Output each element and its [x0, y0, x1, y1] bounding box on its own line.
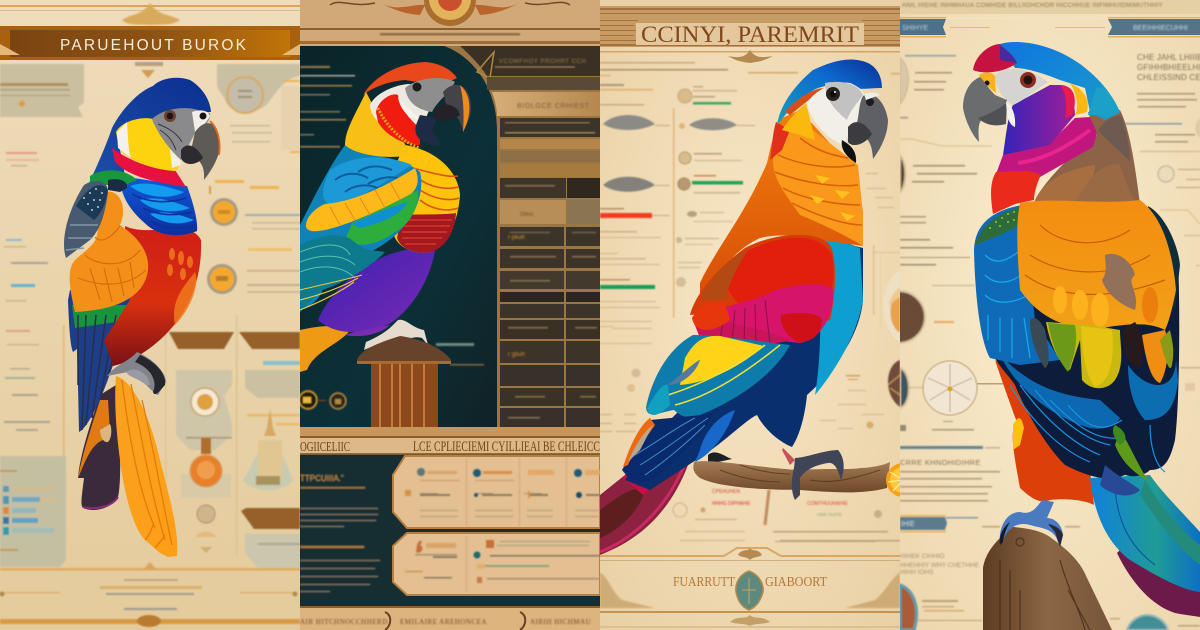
yellow and white cheek	[116, 118, 181, 171]
orange badge two	[207, 264, 237, 294]
orange mantle	[1017, 200, 1176, 330]
wooden stump	[983, 527, 1112, 630]
grey-blue shoulder with dots	[64, 179, 127, 258]
red belly orange flecks	[167, 248, 196, 325]
lower left blue tag and text: HHEHHIY WHY CHETHHE	[900, 562, 980, 569]
red crown	[363, 62, 457, 95]
left dial fragment and captions	[900, 368, 1000, 502]
green neck band	[90, 170, 137, 185]
title header: CCINYI, PAREMRIT	[641, 22, 859, 47]
right side detail	[820, 73, 900, 429]
dark throat	[842, 140, 856, 163]
top intro text lines	[600, 62, 798, 106]
grey face speckle	[398, 78, 455, 120]
info card one	[393, 456, 600, 528]
wing feathers	[300, 145, 421, 312]
lower left blue tag and text	[900, 515, 1200, 630]
top text strip and banners	[900, 0, 1200, 38]
magenta and red neck	[991, 117, 1097, 214]
red neck streak	[770, 122, 790, 160]
panel: poster one, blue and orange parrot	[0, 0, 300, 630]
blue crown and nape	[973, 42, 1120, 120]
blue upper wing	[974, 205, 1060, 365]
brown banners and column cards	[169, 332, 300, 568]
parrot illustration four	[963, 42, 1200, 630]
title banner: PARUEHOUT BUROK	[60, 37, 247, 54]
top ornament	[0, 3, 300, 25]
info card two	[393, 533, 600, 595]
blue chest feathers	[120, 176, 197, 235]
lower left blue tag and text: IHIE	[901, 521, 915, 528]
grey face patch	[152, 108, 210, 160]
grey capsule icons	[603, 115, 755, 192]
parrot illustration one	[64, 78, 220, 557]
footer ornament	[0, 562, 300, 627]
title header	[600, 0, 900, 63]
top text strip and banners: SHIHYE	[902, 25, 928, 32]
lower left fragments: HIIIE DUITE	[817, 512, 842, 517]
left info panel	[0, 64, 84, 117]
panel: poster four, rainbow parrot on stump	[873, 0, 1200, 630]
right side data table: Glinc	[520, 212, 534, 218]
white face and red cheek	[370, 84, 440, 148]
right wing edge	[1148, 206, 1180, 310]
layered chest feathers	[390, 145, 460, 253]
right side text lines	[165, 125, 300, 555]
lower heading band: LCE CPLIECIEMI CYILLIEAI BE CHLEICC	[413, 439, 600, 455]
dark panel with curved shoulder	[481, 396, 497, 427]
panel: poster three, orange and blue parrot on branch	[600, 0, 920, 630]
wooden pedestal	[357, 336, 451, 427]
right side data table: r pkuh	[508, 235, 525, 241]
dark panel side text	[300, 66, 484, 366]
blue tail coverts	[622, 414, 712, 483]
footer with crest: FUARRUTT	[673, 575, 735, 590]
progress bars and round icons	[600, 86, 743, 327]
bottom left blue list panel	[0, 456, 66, 567]
orange badge one	[210, 198, 238, 226]
lower left fragments: CPEHUHEN	[712, 489, 740, 495]
subheading above parrot	[135, 62, 163, 78]
purple belly	[318, 249, 435, 332]
parrot illustration two	[299, 62, 471, 427]
right side data table: r gbuh	[508, 352, 525, 358]
compass dial	[923, 361, 1012, 415]
top text strip and banners: BEEIHHIECUHHI	[1133, 25, 1188, 32]
small round icons	[299, 391, 346, 409]
yellow and blue wing stripes	[646, 335, 790, 417]
yellow-green feathers	[1030, 318, 1173, 388]
wooden branch	[693, 461, 890, 492]
purple cheek	[1003, 85, 1075, 155]
grey hooked beak	[848, 93, 888, 159]
right side data table	[444, 46, 600, 427]
head and nape blue	[88, 78, 211, 185]
magenta wing covert	[692, 284, 833, 344]
grey talons gripping perch	[107, 352, 166, 395]
panel: poster two, dark teal with rainbow parrot	[299, 0, 600, 630]
dark tail feathers	[78, 385, 120, 510]
lower left fragments: COMTHUUHAHIE	[807, 501, 848, 507]
lower heading band	[300, 427, 600, 455]
top header with medallion	[300, 0, 600, 46]
bright orange neck feathers	[773, 119, 863, 246]
hooked beak	[181, 121, 220, 180]
blue wing primaries	[68, 290, 130, 432]
hooked beak	[434, 85, 471, 132]
magenta and maroon tail	[600, 445, 694, 555]
red collar	[112, 148, 186, 187]
right side text column	[1120, 53, 1200, 391]
right side data table: BIOLGCE CRHIEST	[517, 103, 590, 110]
building illustration	[243, 408, 293, 490]
orange neck	[700, 110, 863, 310]
left dial fragment and captions: CRRE KHNOHIDIHRE	[900, 458, 981, 467]
footer with crest: GIABOORT	[765, 575, 827, 590]
footer strip	[300, 606, 600, 630]
red-orange back	[690, 235, 835, 330]
title banner	[0, 26, 300, 60]
orange wing	[70, 191, 148, 312]
lower heading band: OGIICELIIC	[300, 440, 350, 455]
grey beak	[963, 77, 1015, 142]
orange thigh	[995, 360, 1094, 505]
blue back and belly	[625, 231, 863, 490]
blue lower wing	[975, 220, 1179, 495]
footer with crest	[600, 548, 900, 628]
white face	[807, 82, 865, 146]
pale talons	[364, 320, 428, 360]
footer strip: AIRIH HICHMAU	[530, 618, 591, 626]
footer strip: AIR HITCHNOCCHHERD	[300, 618, 388, 626]
orange slice	[886, 463, 920, 497]
lower dark text column: TTPCUIIIA."	[300, 474, 344, 483]
blue head crown	[777, 59, 882, 125]
lower dark text column	[300, 455, 600, 607]
right side data table: VCOMFHOY PROHRT CCH	[499, 59, 586, 65]
face patch with eye	[979, 69, 1048, 105]
lower left fragments	[600, 328, 900, 542]
footer strip: EMILAIRE AREHONCEA	[400, 618, 487, 626]
left side infographic fragments	[873, 55, 992, 343]
yellow cheek	[782, 103, 815, 140]
lower left blue tag and text: HIHH IOHS	[900, 569, 934, 576]
dark neck	[415, 115, 442, 146]
blue clawed foot	[1000, 500, 1063, 547]
orange long tail	[115, 376, 177, 557]
top text strip and banners: ANIL HIEHE INHMHAUA COMHIDE BILLIIOHCHOR HICCHHUE INFIMHUIDMIMUTHHIY	[902, 3, 1163, 9]
orange tail tip	[300, 326, 352, 372]
yellow nape	[345, 92, 408, 157]
left side labels	[4, 152, 64, 460]
right info panel with medallion	[217, 64, 300, 153]
clawed foot on branch	[782, 448, 844, 500]
brown shoulder feathers	[1033, 110, 1140, 205]
lower left blue tag and text: HIHEK CIHHIO	[900, 553, 944, 560]
tail feathers	[1090, 475, 1200, 617]
foot on branch left	[708, 452, 732, 484]
parrot illustration three	[600, 59, 920, 555]
lower left fragments: HHHG DIPHAHE	[712, 501, 751, 507]
red belly	[104, 226, 201, 366]
